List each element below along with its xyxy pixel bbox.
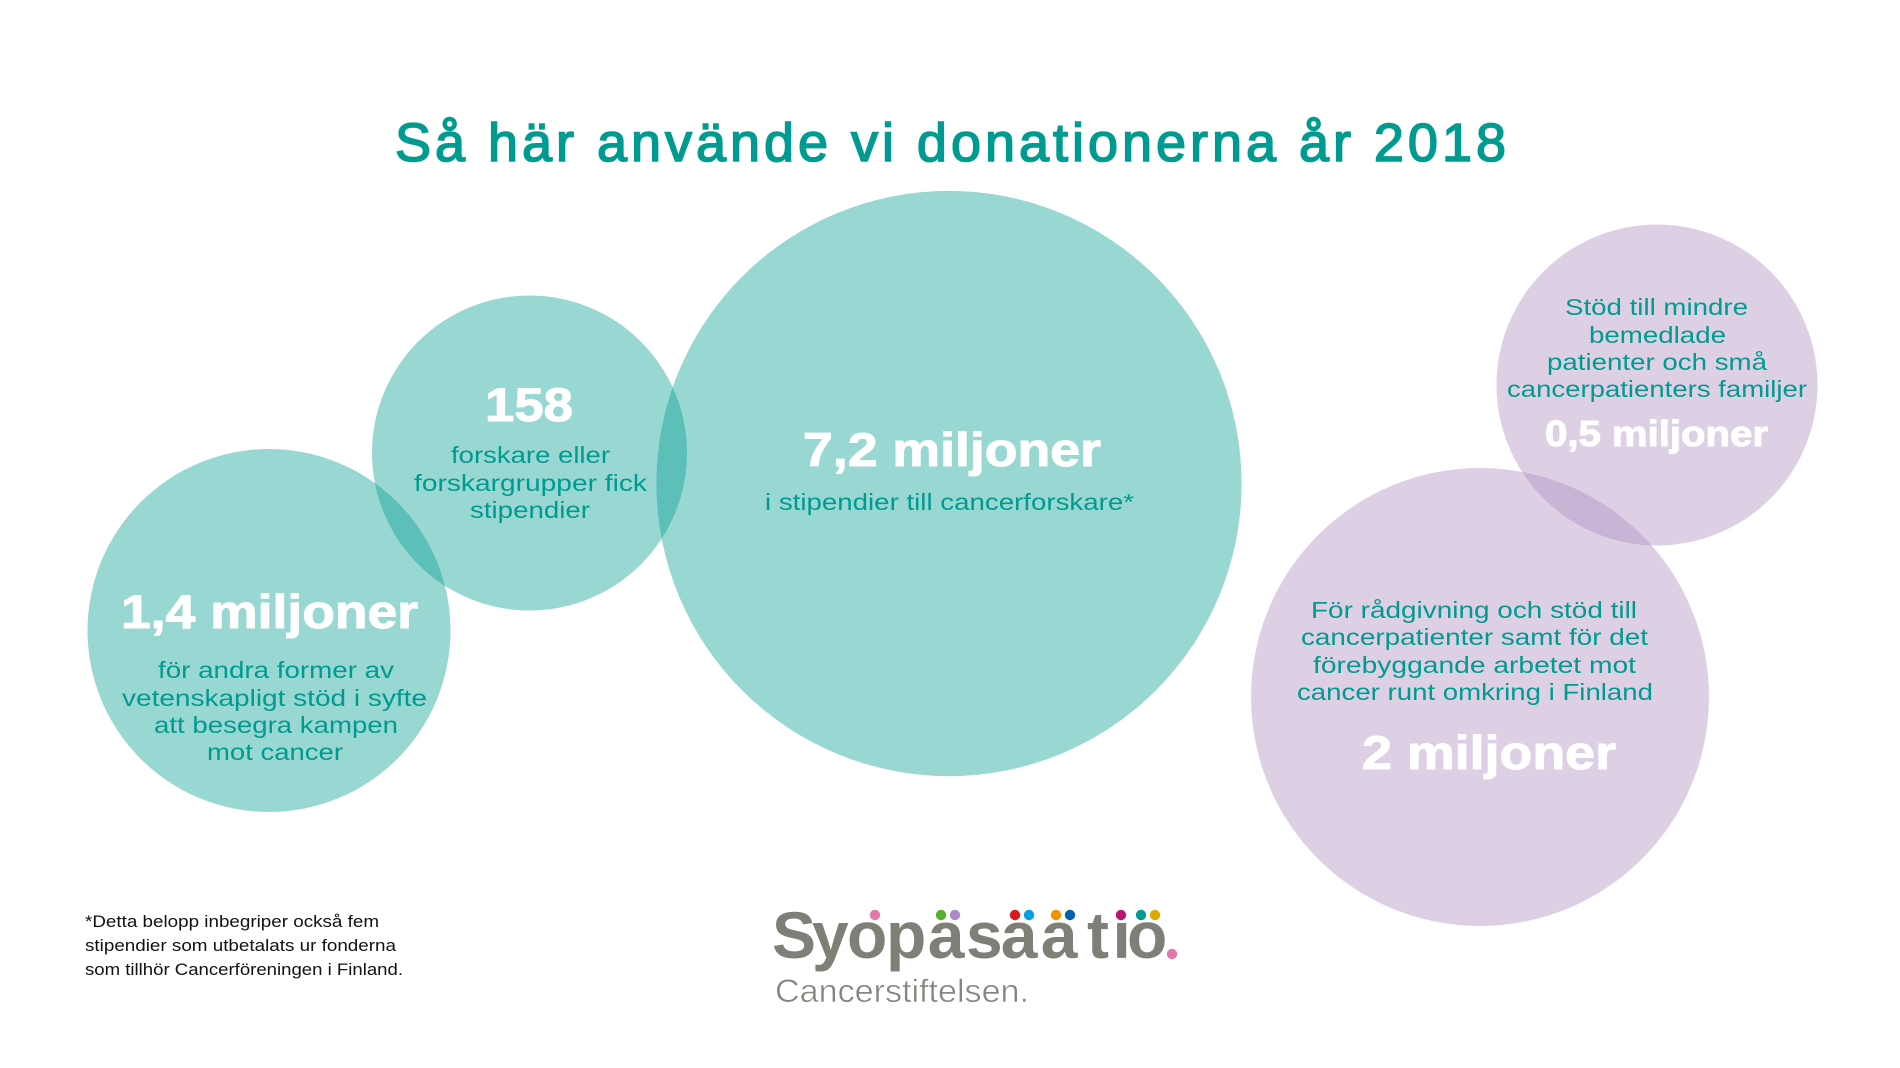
text block: 2 miljoner: cancer runt omkring i Finland <box>1297 679 1653 705</box>
text block: 1,4 miljoner: vetenskapligt stöd i syfte <box>122 685 427 711</box>
text block: 158 researchers: stipendier <box>470 497 590 523</box>
panel: purple bubbles <box>1251 224 1818 926</box>
text block: 7,2 miljoner: i stipendier till cancerforskare* <box>765 489 1134 515</box>
text block: 2 miljoner: förebyggande arbetet mot <box>1313 652 1637 678</box>
footnote: *Detta belopp inbegriper också fem <box>85 913 379 931</box>
title: Så här använde vi donationerna år 2018 <box>395 113 1506 173</box>
text block: 0,5 miljoner: Stöd till mindre <box>1565 294 1748 320</box>
logo: Syöpäsäätiö Cancerstiftelsen <box>772 898 1177 1009</box>
logo diaeresis masks <box>850 902 1168 920</box>
text block: 0,5 miljoner: patienter och små <box>1547 349 1767 375</box>
text block: 2 miljoner <box>1297 597 1653 779</box>
bubble: other scientific support <box>88 449 450 812</box>
bubble: less fortunate patients <box>1496 224 1818 546</box>
text block: 158 researchers: forskargrupper fick <box>414 470 648 496</box>
text block: 158 researchers: 158 <box>485 378 573 431</box>
text block: 7,2 miljoner: 7,2 miljoner <box>803 423 1101 476</box>
text block: 158 researchers: forskare eller <box>451 442 610 468</box>
text block: 0,5 miljoner: cancerpatienters familjer <box>1507 376 1807 402</box>
text block: 2 miljoner: 2 miljoner <box>1362 726 1616 779</box>
bubble: grants <box>656 191 1242 776</box>
text block: 1,4 miljoner: att besegra kampen <box>154 712 398 738</box>
text block: 2 miljoner: För rådgivning och stöd till <box>1311 597 1637 623</box>
text block: 0,5 miljoner <box>1507 294 1807 454</box>
footnote <box>85 913 403 979</box>
text block: 1,4 miljoner: 1,4 miljoner <box>121 585 418 638</box>
footnote: som tillhör Cancerföreningen i Finland. <box>85 961 403 979</box>
text block: 0,5 miljoner: bemedlade <box>1589 322 1726 348</box>
logo subtitle: Cancerstiftelsen. <box>775 973 1029 1009</box>
logo wordmark: Syöpäsäätiö <box>772 898 1167 972</box>
logo coloured dots <box>870 910 1177 959</box>
text block: 1,4 miljoner <box>121 585 427 765</box>
panel: teal bubbles <box>88 191 1242 812</box>
text block: 1,4 miljoner: för andra former av <box>158 657 395 683</box>
text block: 2 miljoner: cancerpatienter samt för det <box>1301 624 1649 650</box>
text block: 7,2 miljoner <box>765 423 1134 515</box>
text block: 0,5 miljoner: 0,5 miljoner <box>1545 413 1768 454</box>
text block: 1,4 miljoner: mot cancer <box>207 739 343 765</box>
footnote: stipendier som utbetalats ur fonderna <box>85 937 397 955</box>
bubble: counselling and support <box>1251 468 1709 926</box>
text block: 158 researchers <box>414 378 648 523</box>
bubble: researchers <box>372 296 687 610</box>
